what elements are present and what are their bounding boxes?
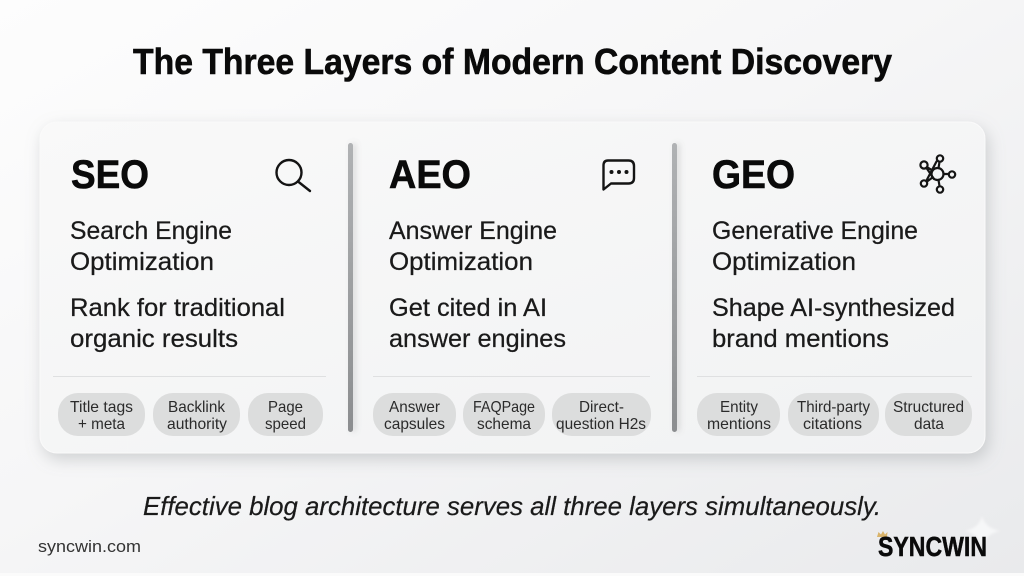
pill: structured data: Structured xyxy=(893,399,964,416)
text: GEO goal xyxy=(712,294,955,353)
pill: FAQPage schema xyxy=(463,393,545,436)
pill: title tags xyxy=(58,393,145,436)
website url: syncwin.com xyxy=(38,538,141,556)
pill: entity mentions: mentions xyxy=(707,416,771,433)
panel: AEO xyxy=(373,153,651,436)
pill: title tags: + meta xyxy=(78,416,125,433)
panel: GEO xyxy=(697,153,972,436)
pill: third-party citations xyxy=(788,393,879,436)
pill: FAQPage schema: schema xyxy=(477,416,531,433)
text: GEO goal: Shape AI-synthesized xyxy=(712,294,955,322)
text: AEO goal: answer engines xyxy=(389,325,566,353)
pill: direct-question H2s: question H2s xyxy=(556,416,646,433)
text: SEO goal: Rank for traditional xyxy=(70,294,285,322)
text: AEO name xyxy=(389,217,557,276)
text: GEO goal: brand mentions xyxy=(712,325,889,353)
pill: answer capsules xyxy=(373,393,456,436)
text: AEO goal xyxy=(389,294,566,353)
text: SEO name xyxy=(70,217,232,276)
icon: chat bubble xyxy=(604,160,634,190)
divider: SEO and AEO xyxy=(348,143,353,432)
pill: backlink authority xyxy=(153,393,240,436)
pill: answer capsules: Answer xyxy=(389,399,441,416)
logo: Syncwin xyxy=(877,516,1000,562)
icon: crown xyxy=(877,531,888,537)
text: AEO goal: Get cited in AI xyxy=(389,294,547,322)
pill: third-party citations: Third-party xyxy=(797,399,870,416)
text: SEO goal xyxy=(70,294,285,353)
heading: AEO: AEO xyxy=(389,153,471,197)
pill: answer capsules: capsules xyxy=(384,416,445,433)
text: SEO name: Optimization xyxy=(70,248,214,276)
pill: page speed: Page xyxy=(268,399,303,416)
pill: structured data: data xyxy=(914,416,944,433)
text: SEO goal: organic results xyxy=(70,325,238,353)
pill: entity mentions xyxy=(697,393,780,436)
pill: structured data xyxy=(885,393,972,436)
pill: title tags: Title tags xyxy=(70,399,133,416)
pill: direct-question H2s: Direct- xyxy=(579,399,624,416)
text: SEO name: Search Engine xyxy=(70,217,232,245)
pill: page speed: speed xyxy=(265,416,306,433)
heading: SEO: SEO xyxy=(71,153,149,197)
pill: direct-question H2s xyxy=(552,393,651,436)
text: GEO name: Optimization xyxy=(712,248,856,276)
pill: third-party citations: citations xyxy=(803,416,862,433)
divider: AEO and GEO xyxy=(672,143,677,432)
tagline: Effective blog architecture serves all three layers simultaneously. xyxy=(143,491,881,521)
panel: SEO xyxy=(53,153,326,436)
icon: magnifying glass xyxy=(276,160,310,191)
text: AEO name: Answer Engine xyxy=(389,217,557,245)
heading: GEO: GEO xyxy=(712,153,795,197)
text: AEO name: Optimization xyxy=(389,248,533,276)
logo: Syncwin: SYNCWIN xyxy=(878,531,987,562)
pill: entity mentions: Entity xyxy=(720,399,758,416)
text: GEO name: Generative Engine xyxy=(712,217,918,245)
icon: network nodes xyxy=(920,155,955,193)
pill: FAQPage schema: FAQPage xyxy=(473,399,535,416)
panel: three layer card xyxy=(40,122,985,453)
pill: page speed xyxy=(248,393,323,436)
title: The Three Layers of Modern Content Discovery xyxy=(133,41,893,82)
icon: sparkle xyxy=(965,516,1000,547)
pill: backlink authority: Backlink xyxy=(168,399,226,416)
text: GEO name xyxy=(712,217,918,276)
pill: backlink authority: authority xyxy=(167,416,227,433)
